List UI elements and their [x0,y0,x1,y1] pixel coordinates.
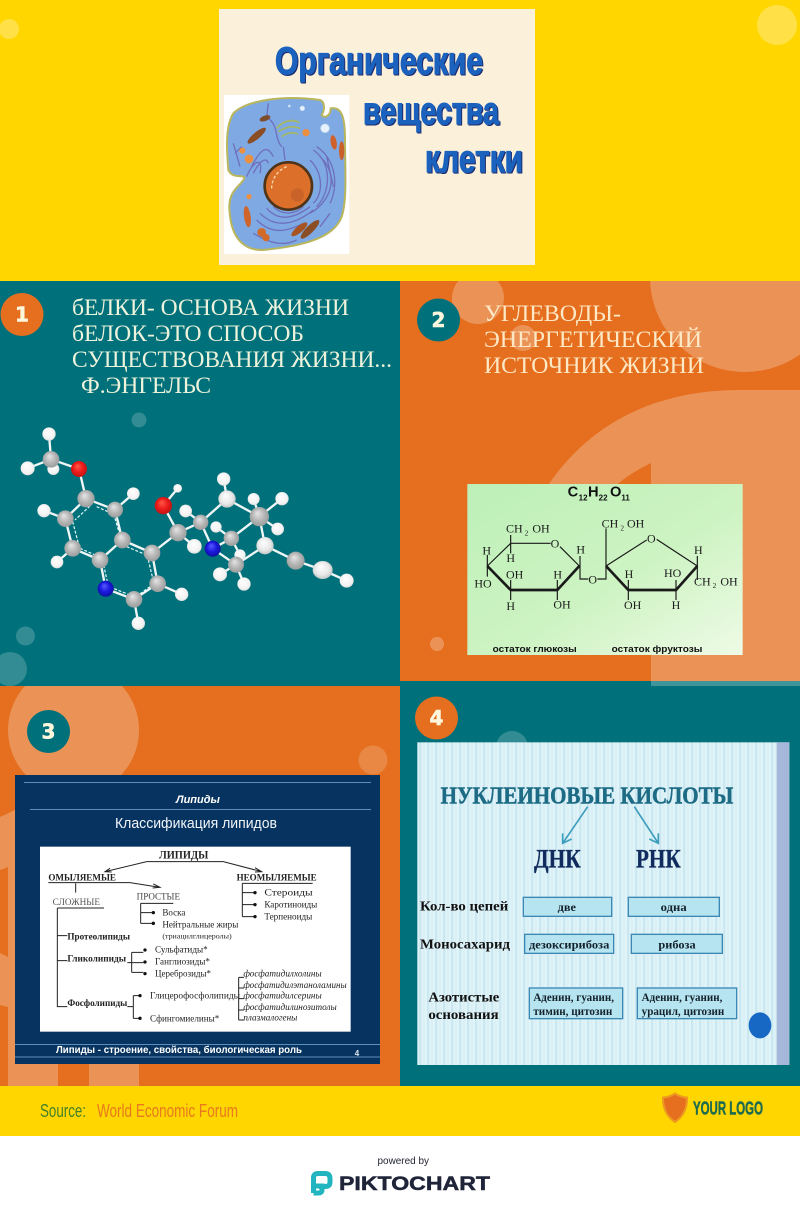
atom labels: CH [506,522,523,536]
heading: proteins: СУЩЕСТВОВАНИЯ ЖИЗНИ... [72,347,392,372]
DNA and RNA labels: РНК [636,844,681,873]
classification diagram: ОМЫЛЯЕМЫЕ [48,873,116,883]
classification diagram: Гликолипиды [67,953,126,963]
number badge 1 [0,293,44,336]
source line [40,1101,238,1121]
title text [275,40,523,181]
classification diagram: ПРОСТЫЕ [137,891,181,901]
source line: Source: [40,1101,86,1121]
source line: World Economic Forum [97,1101,238,1121]
atom labels: OH [553,598,571,612]
atom labels: H [672,598,681,612]
panel 4: nucleic acids [400,681,800,1086]
table cells [523,897,737,1019]
heading: carbohydrates [484,301,704,378]
residue captions: остаток глюкозы [493,644,577,654]
classification diagram: Протеолипиды [67,932,130,942]
atom labels: 2 [620,523,624,532]
table cells: дезоксирибоза [529,939,610,951]
row labels: Азотистые [428,991,499,1006]
atom labels: OH [627,517,645,531]
atom labels: HO [664,566,682,580]
classification diagram: СЛОЖНЫЕ [53,897,101,907]
classification diagram: Стероиды [264,888,313,898]
icon: Piktochart mark [314,1174,330,1193]
atom labels: OH [720,574,738,588]
molecular formula: 22 [599,494,608,503]
atom labels: O [588,573,597,587]
table cells: рибоза [658,939,696,951]
slide subtitle: Классификация липидов [115,815,277,832]
classification diagram: фосфатидилсерины [243,991,322,1001]
atom labels: O [551,536,560,550]
classification diagram: Сульфатиды* [155,945,208,955]
DNA and RNA labels: ДНК [534,844,581,873]
lipid classification slide [15,775,380,1064]
DNA and RNA labels [534,844,681,873]
atom labels: H [694,543,703,557]
heading: proteins [72,295,392,398]
your logo [663,1094,763,1122]
heading: proteins: бЕЛКИ- ОСНОВА ЖИЗНИ [72,295,349,320]
classification diagram: Глицерофосфолипиды [150,991,240,1001]
powered by Piktochart: powered by [378,1155,430,1167]
classification diagram: Нейтральные жиры [162,919,238,929]
title text: Органические [275,40,483,83]
classification diagram: фосфатидилинозитолы [243,1002,337,1012]
classification diagram: Каротиноиды [264,900,317,910]
table cells: две [558,902,576,914]
atom labels: OH [532,522,550,536]
slide title: Липиды [175,794,221,806]
heading: carbohydrates: ИСТОЧНИК ЖИЗНИ [484,353,704,378]
classification diagram: Ганглиозиды* [155,957,210,967]
table cells: Аденин, гуанин, [533,992,614,1004]
number badge 2 [417,298,460,342]
molecular formula: O [610,485,621,501]
classification diagram: Терпеноиды [264,912,312,922]
atom labels: H [506,599,515,613]
molecular formula: H [588,485,599,501]
atom labels: H [576,543,585,557]
icon: animal cell [224,95,349,254]
molecular formula: 12 [579,494,588,503]
classification diagram: ЛИПИДЫ [159,847,209,861]
molecular formula [568,485,630,503]
nucleic acids table picture [417,742,789,1065]
residue captions [493,644,703,654]
sucrose formula picture [467,484,743,655]
table heading: НУКЛЕИНОВЫЕ КИСЛОТЫ [441,782,733,809]
atom labels: OH [506,567,524,581]
number badge 3 [27,710,70,753]
atom labels: HO [474,576,492,590]
number badge 4: 4 [430,706,443,730]
powered by Piktochart [0,1136,800,1216]
classification diagram: (триацилглицеролы) [162,931,232,940]
number badge 3: 3 [42,720,55,744]
heading: carbohydrates: УГЛЕВОДЫ- [484,301,621,326]
title text: вещества [363,90,499,133]
row labels: основания [428,1008,499,1023]
number badge 4 [415,696,458,740]
number badge 2: 2 [432,308,445,332]
classification diagram: плазмалогены [243,1013,297,1023]
classification diagram [40,847,351,1032]
molecular formula: C [568,485,579,501]
classification diagram: Воска [162,908,185,918]
atom labels: CH [602,517,619,531]
panel 1: proteins [0,281,400,686]
table cells: одна [661,902,687,914]
atom labels: OH [624,598,642,612]
molecular formula: 11 [621,494,630,503]
atom labels: H [625,567,634,581]
atom labels: H [506,551,515,565]
atom labels: H [482,544,491,558]
powered by Piktochart: PIKTOCHART [339,1174,490,1195]
title picture [219,9,535,265]
classification diagram: Фосфолипиды [67,998,127,1008]
heading: proteins: бЕЛОК-ЭТО СПОСОБ [72,321,304,346]
panel 3: lipids [0,664,400,1086]
table cells: тимин, цитозин [533,1006,613,1018]
your logo: YOUR LOGO [693,1098,763,1118]
classification diagram: Цереброзиды* [155,968,212,978]
heading: proteins: Ф.ЭНГЕЛЬС [81,373,211,398]
blue dot [749,1012,771,1038]
classification diagram: НЕОМЫЛЯЕМЫЕ [237,873,317,883]
title text: клетки [425,138,523,181]
molecule model [21,427,354,630]
table cells: Аденин, гуанин, [642,992,722,1004]
classification diagram: Сфингомиелины* [150,1014,220,1024]
number badge 1: 1 [15,302,29,326]
atom labels: H [553,567,562,581]
slide footer text: Липиды - строение, свойства, биологическая роль [56,1044,302,1056]
atom labels: 2 [713,581,717,590]
slide number: 4 [355,1049,360,1058]
ring bonds [487,528,697,600]
residue captions: остаток фруктозы [612,644,703,654]
panel 2: carbohydrates [400,281,800,686]
footer band [0,1086,800,1136]
header band [0,0,800,281]
atom labels: 2 [525,528,529,537]
row labels [420,900,510,1023]
atom labels: O [647,531,656,545]
heading: carbohydrates: ЭНЕРГЕТИЧЕСКИЙ [484,327,702,352]
row labels: Моносахарид [420,937,510,952]
atom labels: CH [694,574,711,588]
row labels: Кол-во цепей [420,900,508,915]
classification diagram: фосфатидилхолины [243,969,322,979]
classification diagram: фосфатидилэтаноламины [243,980,347,990]
table cells: урацил, цитозин [642,1006,725,1018]
arrows to DNA and RNA [563,807,658,843]
atom labels [474,517,738,613]
